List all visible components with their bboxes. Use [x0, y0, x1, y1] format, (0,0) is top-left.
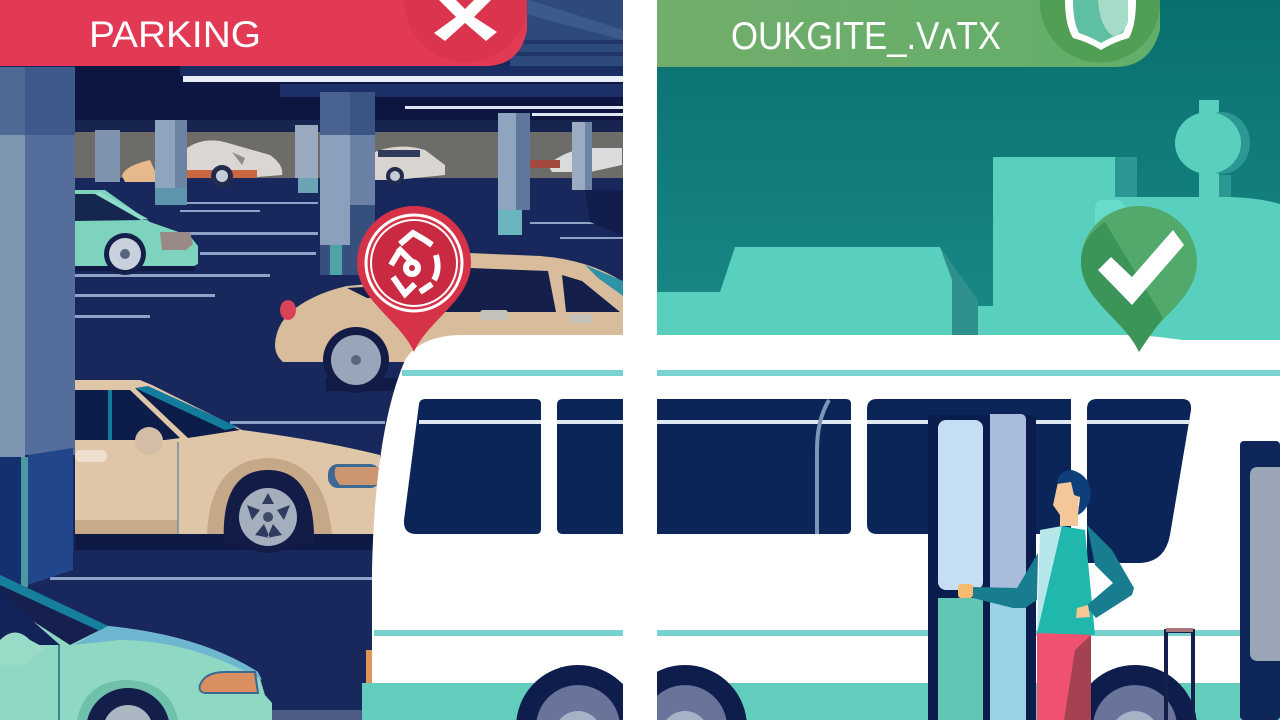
panel: bus route scene	[657, 0, 1280, 340]
trousers	[1037, 633, 1091, 720]
car: beige car front	[75, 380, 385, 553]
icon: cross	[434, 0, 497, 41]
arm on hip	[1086, 525, 1134, 618]
pillar: foreground left	[0, 67, 75, 587]
icon: shield	[1065, 0, 1136, 50]
divider column	[623, 0, 657, 720]
window reflections	[419, 400, 1190, 534]
panel: parking garage scene	[0, 0, 623, 720]
banner: parking	[0, 0, 528, 66]
rear bus door	[1240, 441, 1280, 720]
torso	[1037, 526, 1095, 635]
bus door	[928, 414, 1036, 720]
heading: garbled route label: OUKGITE_.VᴧTX	[731, 15, 1001, 58]
shirt	[1037, 526, 1062, 632]
bus wheels	[516, 665, 1197, 720]
banner: outside	[657, 0, 1160, 67]
car: teal car front	[0, 575, 272, 720]
back wall	[75, 132, 623, 178]
hand on hip	[1076, 605, 1090, 618]
icon: pin emblem	[391, 233, 438, 294]
parked cars in the background	[122, 140, 622, 187]
pin: bus approved	[1081, 206, 1197, 352]
hair	[1057, 470, 1091, 515]
suitcase handle	[1166, 630, 1193, 720]
buildings skyline	[657, 100, 1280, 340]
heading: parking: PARKING	[89, 14, 261, 55]
bus skirt	[362, 683, 1280, 720]
bus	[362, 335, 1280, 720]
car: beige car behind the pin	[275, 253, 623, 393]
ceiling	[75, 0, 623, 132]
car: teal car left	[75, 190, 198, 275]
person boarding the bus	[958, 470, 1134, 720]
pin: parking warning	[357, 206, 471, 352]
garage floor lines	[50, 202, 623, 580]
arm holding the door	[973, 553, 1038, 608]
garage pillars	[95, 92, 623, 275]
hand on door	[958, 584, 973, 598]
bus windows	[404, 399, 1191, 563]
icon: check mark	[1098, 230, 1184, 305]
head	[1053, 482, 1082, 526]
bus stripes	[374, 370, 1280, 636]
